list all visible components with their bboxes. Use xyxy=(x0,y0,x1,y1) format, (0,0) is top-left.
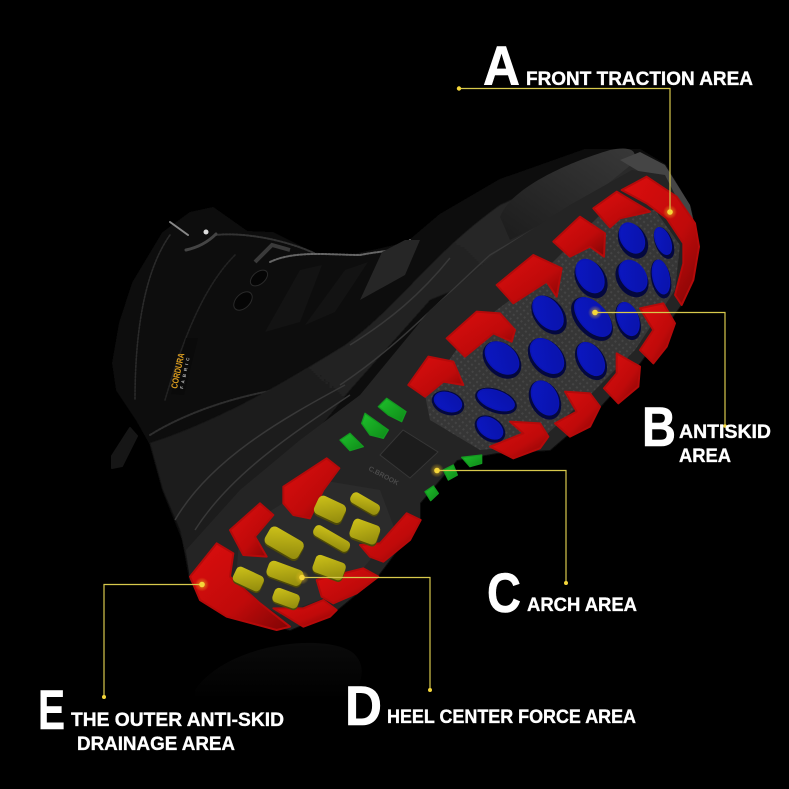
toe lug xyxy=(622,177,699,305)
letter A: A xyxy=(483,34,520,97)
leader line B xyxy=(595,312,725,426)
callout C: arch area xyxy=(430,464,637,624)
tread texture heel xyxy=(235,480,395,615)
callout D: heel center force area xyxy=(295,570,636,737)
leader line A xyxy=(459,88,670,212)
callout A: front traction area xyxy=(457,34,753,219)
midsole wall xyxy=(150,150,665,575)
leader line D xyxy=(302,578,430,690)
arch lug large xyxy=(378,398,406,422)
leader line C xyxy=(437,470,566,583)
letter C: C xyxy=(487,561,521,624)
label D: HEEL CENTER FORCE AREA xyxy=(387,706,636,728)
midsole highlight ridges xyxy=(175,190,600,535)
eyelets and laces xyxy=(204,230,420,332)
heel outer lug xyxy=(190,543,290,630)
marker dot D xyxy=(295,570,432,692)
blue lug shadows xyxy=(429,219,677,447)
heel red lugs xyxy=(190,458,421,630)
label B: ANTISKID xyxy=(679,421,771,443)
marker dot C xyxy=(430,464,568,585)
tread texture forefoot xyxy=(425,210,680,450)
callout B: antiskid area xyxy=(588,306,771,467)
toe bumper xyxy=(620,152,699,245)
collar stitching and seams xyxy=(135,222,410,458)
cordura fabric label xyxy=(169,338,198,395)
arch green lugs xyxy=(340,398,482,501)
brand embossing: C.BROOK xyxy=(367,466,400,487)
marker dot B xyxy=(588,306,727,428)
callout E: outer anti-skid drainage area xyxy=(38,578,284,755)
heel yellow lugs xyxy=(231,491,382,611)
marker dots A xyxy=(457,86,677,219)
yellow lug tops xyxy=(231,491,382,610)
forefoot blue lugs xyxy=(429,219,677,447)
label E: THE OUTER ANTI-SKID xyxy=(71,709,284,731)
letter E: E xyxy=(38,678,65,741)
floor reflection of boot xyxy=(195,643,362,700)
cordura fabric label: CORDURA xyxy=(169,352,187,389)
letter B: B xyxy=(642,395,676,458)
boot illustration xyxy=(112,149,699,630)
forefoot red lugs xyxy=(408,177,699,458)
cordura fabric label: FABRIC xyxy=(179,354,191,389)
outsole base xyxy=(186,170,695,630)
label B second line: AREA xyxy=(679,445,731,467)
label C: ARCH AREA xyxy=(527,594,637,616)
yellow lug shadows xyxy=(231,492,382,611)
marker dot E xyxy=(102,578,209,699)
pull tab xyxy=(112,428,137,468)
leader line E xyxy=(104,584,202,697)
toe cap xyxy=(500,149,635,240)
boot upper silhouette xyxy=(113,150,699,630)
letter D: D xyxy=(345,674,382,737)
label A: FRONT TRACTION AREA xyxy=(526,68,753,90)
label E second line: DRAINAGE AREA xyxy=(77,733,235,755)
arch plate xyxy=(380,430,438,478)
blue lug tops xyxy=(432,219,675,443)
